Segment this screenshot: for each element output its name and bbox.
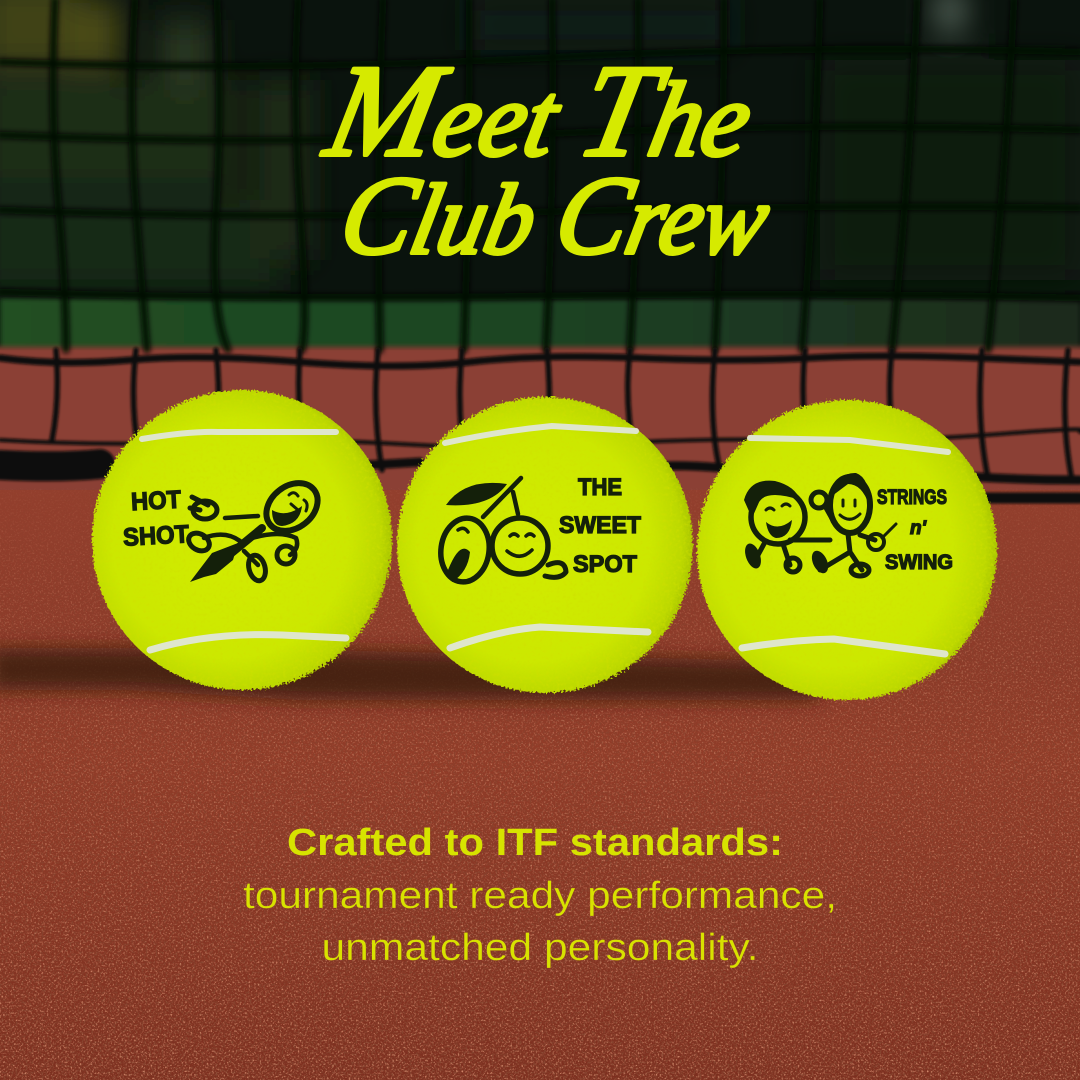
shadow under the balls [0,648,820,700]
stamp character: two cherries [437,478,566,585]
stamp text: The Sweet Spot: SPOT [573,551,637,578]
stamp text: The Sweet Spot: SWEET [559,512,641,539]
tagline heading: Crafted to ITF standards: [287,822,783,864]
stamp text: The Sweet Spot: THE [578,474,622,501]
ball seams [142,432,346,650]
stamp text: Strings n' Swing: STRINGS [877,486,947,509]
title: Club Crew [331,154,781,278]
stamp text: Hot Shot [122,486,190,552]
tagline [243,822,837,969]
background: court wall [0,347,1080,497]
ball seams [742,438,948,654]
title [314,37,781,278]
stamp text: The Sweet Spot [559,474,641,578]
stamp text: Strings n' Swing: SWING [885,551,953,574]
ball: The Sweet Spot [397,397,693,693]
tennis net [0,0,1080,498]
stamp text: Hot Shot: SHOT [122,520,190,552]
tagline body: tournament ready performance, [243,875,837,917]
stamp characters: racket and ball [742,473,896,576]
stamp text: Hot Shot: HOT [130,486,182,516]
title: Meet The [314,37,767,184]
ball: Strings n' Swing [697,400,997,700]
tagline body [243,875,837,969]
stamp character: racket with flame [185,473,327,583]
background: blurred foliage [0,0,1080,350]
ball: Hot Shot [92,390,392,690]
tagline body: unmatched personality. [322,927,758,969]
stamp text: Strings n' Swing: n' [910,518,928,539]
clay court floor [0,488,1080,1080]
stamp text: Strings n' Swing [877,486,953,574]
ball seams [445,426,648,648]
